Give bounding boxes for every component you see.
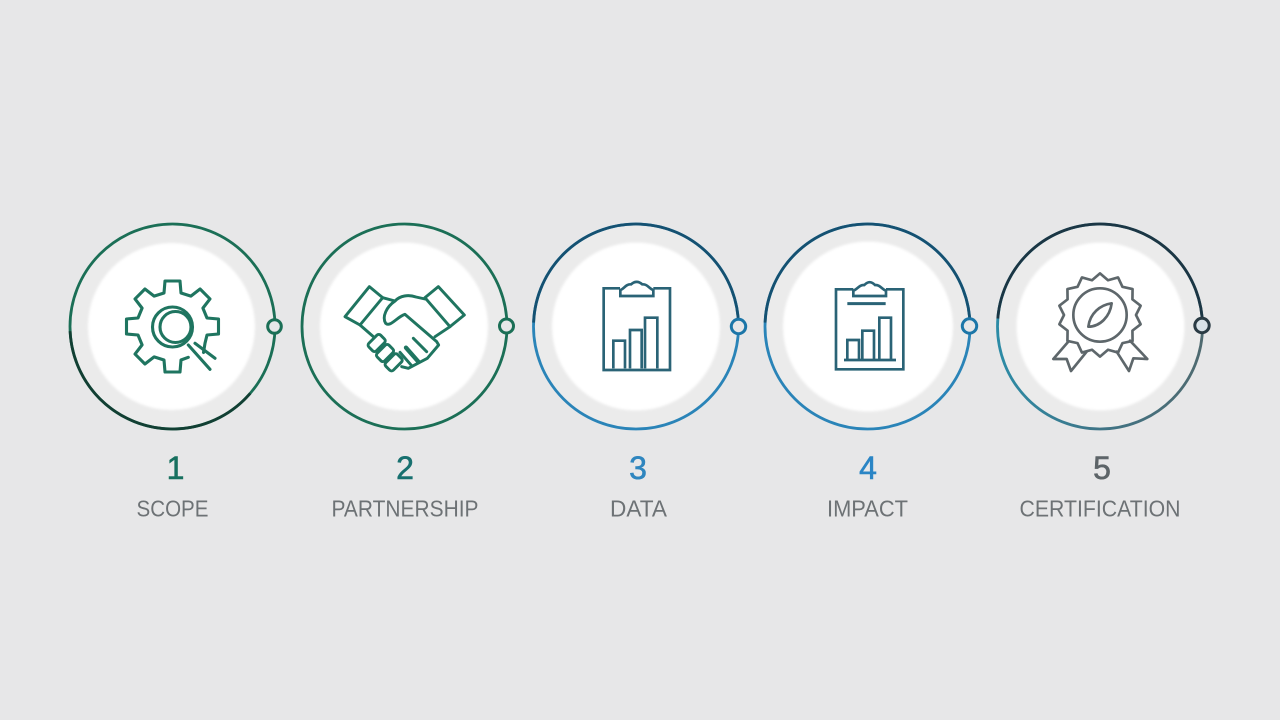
- icon: clipboard with bar chart: [604, 282, 670, 370]
- label: certification: CERTIFICATION: [1020, 496, 1180, 522]
- step 5: certification: [989, 216, 1211, 522]
- label: partnership: PARTNERSHIP: [332, 496, 478, 522]
- step 3: data: [529, 220, 746, 521]
- label: impact: IMPACT: [827, 496, 908, 522]
- label: scope: SCOPE: [136, 496, 208, 522]
- connector node: partnership: [500, 319, 514, 333]
- ring: data: [529, 220, 743, 433]
- step 2: partnership: [302, 224, 514, 522]
- ring: scope: [28, 182, 317, 471]
- ring: certification: [989, 216, 1211, 437]
- connector node: certification: [1195, 318, 1209, 333]
- number: 4: 4: [859, 450, 877, 486]
- ring: impact: [761, 220, 974, 433]
- icon: handshake: [345, 287, 464, 372]
- icon: gear with magnifier: [126, 281, 218, 372]
- number: 1: 1: [167, 450, 184, 486]
- icon: award rosette: [1053, 273, 1147, 371]
- step 1: scope: [28, 182, 317, 521]
- number: 5: 5: [1093, 450, 1111, 486]
- ring: partnership: [302, 224, 507, 429]
- icon: clipboard with report chart: [836, 282, 903, 369]
- step 4: impact: [761, 220, 977, 521]
- label: data: DATA: [610, 496, 668, 522]
- number: 3: 3: [629, 450, 647, 486]
- connector node: data: [731, 319, 746, 334]
- number: 2: 2: [396, 450, 414, 486]
- connector node: impact: [962, 319, 977, 333]
- connector node: scope: [268, 320, 281, 333]
